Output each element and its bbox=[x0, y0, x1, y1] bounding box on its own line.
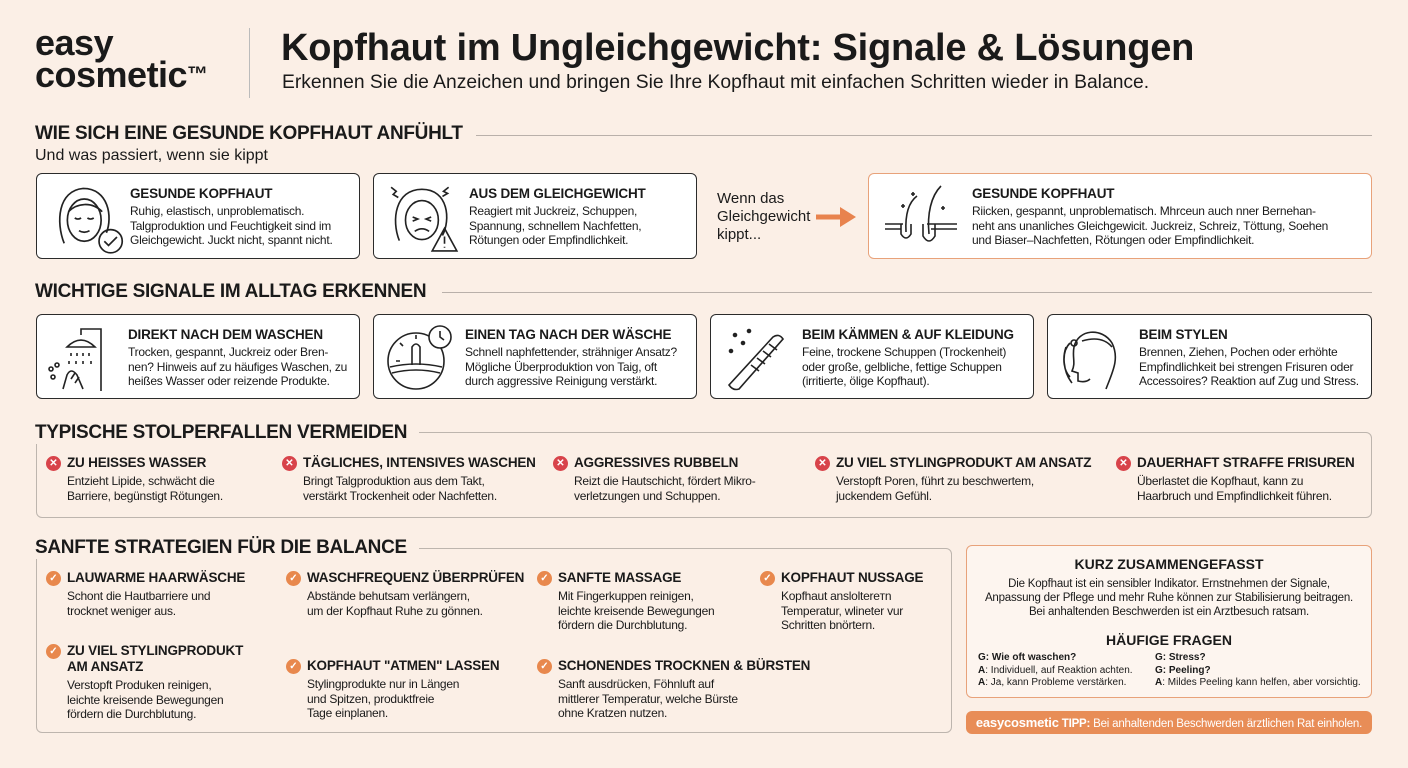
text: wenn das gleichgewicht kippt: kippt... bbox=[717, 226, 761, 243]
section 3 heading: TYPISCHE STOLPERFALLEN VERMEIDEN bbox=[35, 422, 407, 443]
item: waschfrequenz bbox=[286, 570, 524, 618]
item: straffe frisuren: Haarbruch und Empfindlichkeit führen. bbox=[1137, 488, 1332, 502]
card: einen tag nach der wäsche bbox=[373, 314, 697, 399]
card: direkt nach dem waschen bbox=[36, 314, 360, 399]
card: direkt nach dem waschen: Trocken, gespannt, Juckreiz oder Bren- bbox=[128, 345, 328, 359]
item: stylingprodukt: Verstopft Poren, führt zu beschwertem, bbox=[836, 474, 1034, 488]
summary heading: KURZ ZUSAMMENGEFASST bbox=[1074, 556, 1264, 572]
item: stylingprodukt: ZU VIEL STYLINGPRODUKT AM ANSATZ bbox=[836, 455, 1091, 470]
item: lauwarme haarwäsche: trocknet weniger aus. bbox=[67, 604, 176, 618]
card: einen tag nach der wäsche: Schnell naphfettender, strähniger Ansatz? bbox=[465, 345, 677, 359]
item: stylingprodukt bbox=[815, 455, 1092, 502]
summary text bbox=[985, 578, 1353, 618]
card: beim kämmen: oder große, gelbliche, fettige Schuppen bbox=[802, 360, 1002, 374]
card: aus dem gleichgewicht: Spannung, schnellem Nachfetten, bbox=[469, 218, 641, 232]
card: direkt nach dem waschen: nen? Hinweis auf zu häufiges Waschen, zu bbox=[128, 360, 347, 374]
card: einen tag nach der wäsche: EINEN TAG NACH DER WÄSCHE bbox=[465, 327, 671, 342]
item: waschfrequenz: um der Kopfhaut Ruhe zu gönnen. bbox=[307, 604, 483, 618]
item: atmen lassen: KOPFHAUT "ATMEN" LASSEN bbox=[307, 658, 499, 673]
icon: face with check bbox=[58, 188, 124, 254]
card: aus dem gleichgewicht bbox=[373, 173, 697, 259]
item: aggressives rubbeln: ✕ bbox=[556, 458, 565, 469]
item: kopfhaut nussage: ✓ bbox=[763, 573, 772, 584]
card: gesunde kopfhaut (orange) bbox=[868, 173, 1372, 259]
card: einen tag nach der wäsche: Mögliche Überproduktion von Taig, oft bbox=[465, 360, 657, 374]
icon: comb bbox=[728, 328, 784, 390]
item: tägliches waschen: Bringt Talgproduktion aus dem Takt, bbox=[303, 474, 485, 488]
item: atmen lassen: und Spitzen, produktfreie bbox=[307, 692, 434, 706]
summary text: Anpassung der Pflege und mehr Ruhe können zur Stabilisierung beitragen. bbox=[985, 592, 1353, 604]
icon: clock follicle bbox=[387, 325, 452, 390]
item: lauwarme haarwäsche: LAUWARME HAARWÄSCHE bbox=[67, 570, 245, 585]
faq left bbox=[978, 652, 1133, 688]
logo: easy bbox=[35, 22, 113, 63]
card: beim stylen: Empfindlichkeit bei strengen Frisuren oder bbox=[1139, 360, 1353, 374]
item: schonendes trocknen: Sanft ausdrücken, Föhnluft auf bbox=[558, 677, 714, 691]
item: lauwarme haarwäsche: Schont die Hautbarriere und bbox=[67, 589, 210, 603]
item: aggressives rubbeln: verletzungen und Schuppen. bbox=[574, 488, 720, 502]
item: schonendes trocknen bbox=[537, 658, 810, 720]
item: straffe frisuren: DAUERHAFT STRAFFE FRISUREN bbox=[1137, 455, 1355, 470]
subtitle: Erkennen Sie die Anzeichen und bringen Sie Ihre Kopfhaut mit einfachen Schritten wieder in Balance. bbox=[282, 72, 1149, 93]
item: atmen lassen: Tage einplanen. bbox=[307, 706, 388, 720]
card: beim stylen: Accessoires? Reaktion auf Zug und Stress. bbox=[1139, 374, 1359, 388]
faq left: G: Wie oft waschen? bbox=[978, 652, 1076, 663]
item: aggressives rubbeln: Reizt die Hautschicht, fördert Mikro- bbox=[574, 474, 755, 488]
item: straffe frisuren: ✕ bbox=[1119, 458, 1128, 469]
faq left: A: Ja, kann Probleme verstärken. bbox=[978, 677, 1126, 688]
arrow bbox=[816, 207, 856, 227]
section 1 subheading: Und was passiert, wenn sie kippt bbox=[35, 147, 268, 164]
item: stylingprodukt: fördern die Durchblutung. bbox=[67, 707, 196, 721]
card: gesunde kopfhaut (orange): neht ans unanliches Gleichgewicit. Juckreiz, Schreiz, Töttung, Soehen bbox=[972, 218, 1328, 232]
item: aggressives rubbeln bbox=[553, 455, 756, 502]
faq right: G: Peeling? bbox=[1155, 664, 1211, 676]
card: aus dem gleichgewicht: Reagiert mit Juckreiz, Schuppen, bbox=[469, 204, 637, 218]
item: straffe frisuren bbox=[1116, 455, 1355, 502]
faq heading: HÄUFIGE FRAGEN bbox=[1106, 632, 1232, 648]
card: gesunde kopfhaut (orange): Riicken, gespannt, unproblematisch. Mhrceun auch nner Bernehan- bbox=[972, 204, 1316, 218]
item: stylingprodukt: ✓ bbox=[49, 646, 58, 657]
item: schonendes trocknen: ✓ bbox=[540, 661, 549, 672]
item: kopfhaut nussage bbox=[760, 570, 923, 632]
icon: shower bbox=[48, 328, 102, 391]
tip bar bbox=[966, 711, 1372, 734]
panel: stolperfallen bbox=[36, 432, 1372, 518]
logo: cosmetic™ bbox=[35, 54, 208, 95]
faq right: A: Mildes Peeling kann helfen, aber vorsichtig. bbox=[1155, 677, 1361, 688]
icon: hair follicles bbox=[885, 185, 957, 242]
card: beim kämmen: Feine, trockene Schuppen (Trockenheit) bbox=[802, 345, 1006, 359]
item: sanfte massage: ✓ bbox=[540, 573, 549, 584]
item: stylingprodukt: ZU VIEL STYLINGPRODUKT bbox=[67, 643, 243, 658]
faq right bbox=[1155, 652, 1361, 688]
title: Kopfhaut im Ungleichgewicht: Signale & Lösungen bbox=[281, 27, 1194, 69]
panel: kurz zusammengefasst bbox=[966, 545, 1372, 698]
card: direkt nach dem waschen: DIREKT NACH DEM WASCHEN bbox=[128, 327, 323, 342]
item: waschfrequenz: ✓ bbox=[289, 573, 298, 584]
card: beim kämmen bbox=[710, 314, 1034, 399]
item: sanfte massage: leichte kreisende Bewegungen bbox=[558, 604, 714, 618]
section 2 heading: WICHTIGE SIGNALE IM ALLTAG ERKENNEN bbox=[35, 281, 426, 302]
card: gesunde kopfhaut: Gleichgewicht. Juckt nicht, spannt nicht. bbox=[130, 233, 333, 247]
item: atmen lassen: ✓ bbox=[289, 661, 298, 672]
tip bar: easycosmetic TIPP: Bei anhaltenden Beschwerden ärztlichen Rat einholen. bbox=[976, 715, 1362, 730]
item: stylingprodukt: juckendem Gefühl. bbox=[836, 488, 932, 502]
item: stylingprodukt: AM ANSATZ bbox=[67, 659, 143, 674]
card: aus dem gleichgewicht: AUS DEM GLEICHGEWICHT bbox=[469, 186, 646, 201]
item: atmen lassen: Stylingprodukte nur in Längen bbox=[307, 677, 459, 691]
card: gesunde kopfhaut: Talgproduktion und Feuchtigkeit sind im bbox=[130, 218, 331, 232]
summary text: Die Kopfhaut ist ein sensibler Indikator. Ernstnehmen der Signale, bbox=[1008, 578, 1330, 590]
text: wenn das gleichgewicht kippt bbox=[717, 190, 810, 243]
section 4 heading: SANFTE STRATEGIEN FÜR DIE BALANCE bbox=[35, 537, 407, 558]
item: sanfte massage: fördern die Durchblutung. bbox=[558, 618, 687, 632]
item: kopfhaut nussage: Kopfhaut ansloltereтn bbox=[781, 589, 891, 603]
item: zu heisses wasser: ZU HEISSES WASSER bbox=[67, 455, 206, 470]
item: kopfhaut nussage: Schritten bnörtern. bbox=[781, 618, 875, 632]
summary text: Bei anhaltenden Beschwerden ist ein Arztbesuch ratsam. bbox=[1029, 606, 1309, 618]
item: zu heisses wasser bbox=[46, 455, 223, 502]
text: wenn das gleichgewicht kippt: Wenn das bbox=[717, 190, 784, 207]
card: beim stylen: BEIM STYLEN bbox=[1139, 327, 1228, 342]
card: gesunde kopfhaut: GESUNDE KOPFHAUT bbox=[130, 186, 272, 201]
panel: strategien bbox=[36, 548, 952, 733]
icon: stressed face bbox=[390, 186, 458, 252]
card: direkt nach dem waschen: heißes Wasser oder reizende Produkte. bbox=[128, 374, 330, 388]
logo bbox=[35, 22, 208, 95]
item: stylingprodukt: ✕ bbox=[818, 458, 827, 469]
card: gesunde kopfhaut: Ruhig, elastisch, unproblematisch. bbox=[130, 204, 304, 218]
card: beim stylen bbox=[1047, 314, 1372, 399]
text: wenn das gleichgewicht kippt: Gleichgewicht bbox=[717, 208, 810, 225]
card: beim kämmen: BEIM KÄMMEN & AUF KLEIDUNG bbox=[802, 327, 1014, 342]
item: atmen lassen bbox=[286, 658, 499, 720]
item: lauwarme haarwäsche bbox=[46, 570, 245, 618]
item: tägliches waschen: verstärkt Trockenheit oder Nachfetten. bbox=[303, 488, 497, 502]
card: einen tag nach der wäsche: durch aggressive Reinigung verstärkt. bbox=[465, 374, 657, 388]
card: gesunde kopfhaut bbox=[36, 173, 360, 259]
item: schonendes trocknen: ohne Kratzen nutzen. bbox=[558, 706, 667, 720]
card: gesunde kopfhaut (orange): und Biaser–Nachfetten, Rötungen oder Empfindlichkeit. bbox=[972, 233, 1254, 247]
item: schonendes trocknen: SCHONENDES TROCKNEN & BÜRSTEN bbox=[558, 658, 810, 673]
item: waschfrequenz: WASCHFREQUENZ ÜBERPRÜFEN bbox=[307, 570, 524, 585]
item: tägliches waschen: ✕ bbox=[285, 458, 294, 469]
item: kopfhaut nussage: Temperatur, wlineter vur bbox=[781, 604, 903, 618]
section 1 heading: WIE SICH EINE GESUNDE KOPFHAUT ANFÜHLT bbox=[35, 123, 463, 144]
item: schonendes trocknen: mittlerer Temperatur, welche Bürste bbox=[558, 692, 738, 706]
card: aus dem gleichgewicht: Rötungen oder Empfindlichkeit. bbox=[469, 233, 628, 247]
card: beim kämmen: (irritierte, ölige Kopfhaut). bbox=[802, 374, 929, 388]
item: tägliches waschen: TÄGLICHES, INTENSIVES WASCHEN bbox=[303, 455, 536, 470]
item: straffe frisuren: Überlastet die Kopfhaut, kann zu bbox=[1137, 474, 1303, 488]
item: zu heisses wasser: ✕ bbox=[49, 458, 58, 469]
item: sanfte massage: SANFTE MASSAGE bbox=[558, 570, 681, 585]
card: gesunde kopfhaut (orange): GESUNDE KOPFHAUT bbox=[972, 186, 1114, 201]
faq right: G: Stress? bbox=[1155, 652, 1206, 663]
item: aggressives rubbeln: AGGRESSIVES RUBBELN bbox=[574, 455, 738, 470]
item: waschfrequenz: Abstände behutsam verlängern, bbox=[307, 589, 470, 603]
item: stylingprodukt: Verstopft Produken reinigen, bbox=[67, 678, 211, 692]
item: kopfhaut nussage: KOPFHAUT NUSSAGE bbox=[781, 570, 923, 585]
item: zu heisses wasser: Barriere, begünstigt Rötungen. bbox=[67, 488, 223, 502]
item: stylingprodukt bbox=[46, 643, 244, 721]
item: lauwarme haarwäsche: ✓ bbox=[49, 573, 58, 584]
item: stylingprodukt: leichte kreisende Bewegungen bbox=[67, 692, 223, 706]
item: tägliches waschen bbox=[282, 455, 536, 502]
item: zu heisses wasser: Entzieht Lipide, schwächt die bbox=[67, 474, 215, 488]
icon: ponytail head bbox=[1063, 331, 1116, 390]
card: beim stylen: Brennen, Ziehen, Pochen oder erhöhte bbox=[1139, 345, 1337, 359]
item: sanfte massage bbox=[537, 570, 714, 632]
item: sanfte massage: Mit Fingerkuppen reinigen, bbox=[558, 589, 694, 603]
faq left: A: Individuell, auf Reaktion achten. bbox=[978, 664, 1133, 676]
